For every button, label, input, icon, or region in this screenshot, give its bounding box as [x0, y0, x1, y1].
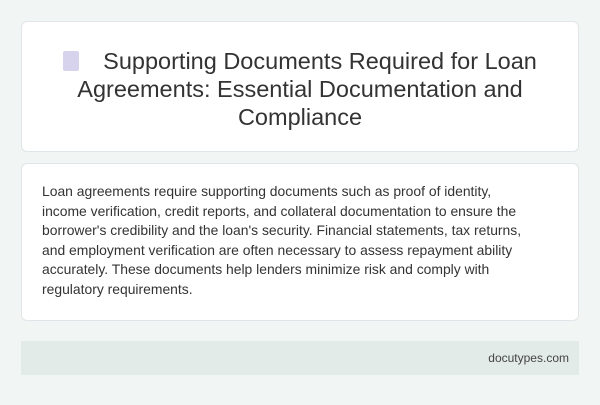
footer [21, 341, 579, 375]
title: Compliance [238, 104, 362, 130]
text block: regulatory requirements. [42, 280, 193, 296]
footer text: docutypes.com [488, 351, 569, 365]
title: Supporting Documents Required for Loan [103, 48, 537, 74]
text block: Loan agreements require supporting documents such as proof of identity, [42, 183, 491, 199]
text block: and employment verification are often necessary to assess repayment ability [42, 242, 512, 258]
text block: accurately. These documents help lenders minimize risk and comply with [42, 261, 489, 277]
title [63, 48, 537, 130]
icon: document [63, 51, 79, 71]
text block: borrower's credibility and the loan's security. Financial statements, tax returns, [42, 222, 521, 238]
panel: description [21, 163, 579, 321]
panel: title [21, 21, 579, 152]
text block [42, 183, 521, 297]
text block: income verification, credit reports, and collateral documentation to ensure the [42, 202, 516, 218]
title: Agreements: Essential Documentation and [77, 76, 523, 102]
